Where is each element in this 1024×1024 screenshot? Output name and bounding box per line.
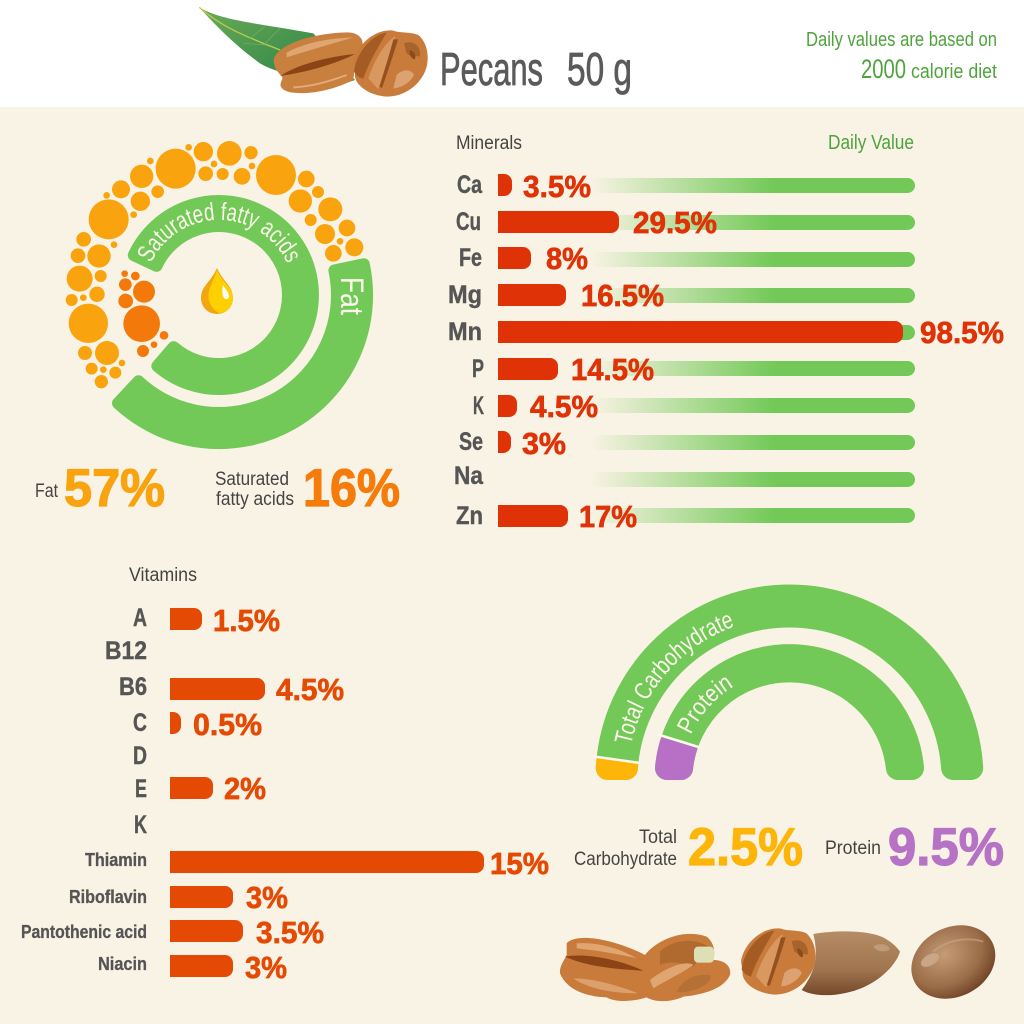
row: B6 — [119, 672, 344, 707]
row: Niacin — [98, 950, 287, 985]
vitamins heading: Vitamins — [129, 565, 197, 586]
row: Se: 3% — [522, 426, 566, 461]
fat arc — [118, 264, 367, 443]
row: B6: B6 — [119, 673, 147, 701]
row: D: D — [133, 742, 147, 770]
illustration: leaf and pecan kernels — [199, 7, 428, 97]
row: Zn: Zn — [456, 502, 483, 530]
daily values note: 2000 — [861, 54, 906, 84]
row: A — [133, 603, 280, 638]
total carbohydrate label: Total Carbohydrate — [614, 615, 733, 742]
row: P: P — [472, 355, 484, 383]
row: E — [135, 771, 266, 806]
row: P — [472, 352, 915, 387]
total carbohydrate percentage: Total — [639, 827, 677, 848]
protein arc — [667, 656, 912, 768]
row: Cu: 29.5% — [633, 205, 717, 240]
fat percentage: 57% — [64, 459, 165, 518]
chart: minerals bars — [448, 169, 1004, 534]
total carbohydrate percentage — [574, 818, 803, 877]
row: Thiamin: 15% — [490, 846, 549, 881]
row: K: K — [473, 392, 484, 420]
protein label: Protein — [676, 678, 733, 734]
chart: vitamins bars — [21, 603, 549, 985]
row: Zn: 17% — [579, 499, 637, 534]
row: C: 0.5% — [193, 707, 262, 742]
protein percentage — [825, 818, 1004, 877]
row: P: 14.5% — [571, 352, 654, 387]
row: Niacin: Niacin — [98, 954, 147, 974]
fat label: Fat — [334, 277, 370, 315]
row: Ca — [457, 169, 915, 204]
row: Riboflavin: Riboflavin — [69, 887, 147, 907]
row: Riboflavin: 3% — [246, 880, 288, 915]
row: Se: Se — [459, 428, 483, 456]
row: Pantothenic acid — [21, 915, 324, 950]
daily value heading: Daily Value — [828, 132, 914, 154]
protein percentage: Protein — [825, 838, 881, 859]
row: B6: 4.5% — [276, 672, 344, 707]
row: Riboflavin — [69, 880, 288, 915]
row: K — [473, 389, 915, 424]
illustration: shelled nut with kernel — [741, 928, 900, 995]
saturated fatty acids percentage — [215, 459, 400, 518]
saturated fatty acids label: Saturated fatty acids — [138, 202, 298, 262]
row: Na: Na — [454, 462, 484, 490]
row: K: K — [134, 811, 147, 839]
total carbohydrate marker — [596, 758, 638, 780]
row: Cu: Cu — [456, 208, 481, 236]
total carbohydrate arc — [608, 596, 971, 768]
chart: carbohydrate and protein arcs — [596, 584, 984, 780]
illustration: pecans — [560, 911, 1008, 1013]
row: Mg: 16.5% — [581, 278, 664, 313]
row: E: E — [135, 775, 147, 803]
icon: oil drop — [201, 268, 233, 314]
fat bubbles — [66, 141, 363, 388]
row: Zn — [456, 499, 915, 534]
illustration: large kernel — [560, 934, 730, 1001]
row: Mn: 98.5% — [920, 315, 1004, 350]
header — [0, 0, 1024, 107]
row: Mn — [448, 315, 1004, 350]
row: Pantothenic acid: Pantothenic acid — [21, 922, 147, 942]
saturated fatty acids percentage: fatty acids — [216, 489, 294, 510]
row: K: 4.5% — [530, 389, 598, 424]
protein percentage: 9.5% — [888, 818, 1004, 877]
protein marker — [655, 737, 698, 780]
illustration: whole pecan — [899, 911, 1008, 1013]
row: Se — [459, 426, 915, 461]
fat percentage: Fat — [35, 481, 59, 502]
chart: fat ring — [66, 141, 374, 450]
daily values note: calorie diet — [911, 61, 997, 83]
row: Na — [454, 462, 915, 490]
daily values note — [806, 29, 997, 84]
row: Fe: Fe — [459, 244, 482, 272]
row: A: A — [133, 604, 147, 632]
row: Ca: 3.5% — [523, 169, 591, 204]
saturated fatty acids arc — [134, 201, 313, 389]
minerals heading: Minerals — [456, 133, 522, 154]
row: Cu — [456, 205, 915, 240]
row: C: C — [133, 709, 147, 737]
saturated fatty acids percentage: 16% — [303, 459, 400, 518]
row: Fe — [459, 241, 915, 276]
row: Ca: Ca — [457, 171, 483, 199]
total carbohydrate percentage: Carbohydrate — [574, 849, 677, 870]
row: Mn: Mn — [448, 318, 482, 346]
row: Fe: 8% — [546, 241, 588, 276]
title: Pecans — [440, 43, 543, 95]
row: B12: B12 — [105, 637, 147, 665]
row: C — [133, 707, 262, 742]
saturated fatty acid bubbles — [118, 270, 168, 357]
row: Mg — [448, 278, 915, 313]
row: Mg: Mg — [448, 281, 482, 309]
total carbohydrate percentage: 2.5% — [688, 818, 803, 877]
row: Niacin: 3% — [245, 950, 287, 985]
row: Pantothenic acid: 3.5% — [256, 915, 324, 950]
row: Thiamin: Thiamin — [85, 850, 147, 870]
title: 50 g — [567, 43, 632, 95]
row: Thiamin — [85, 846, 549, 881]
saturated fatty acids percentage: Saturated — [215, 469, 289, 490]
row: E: 2% — [224, 771, 266, 806]
row: A: 1.5% — [213, 603, 280, 638]
